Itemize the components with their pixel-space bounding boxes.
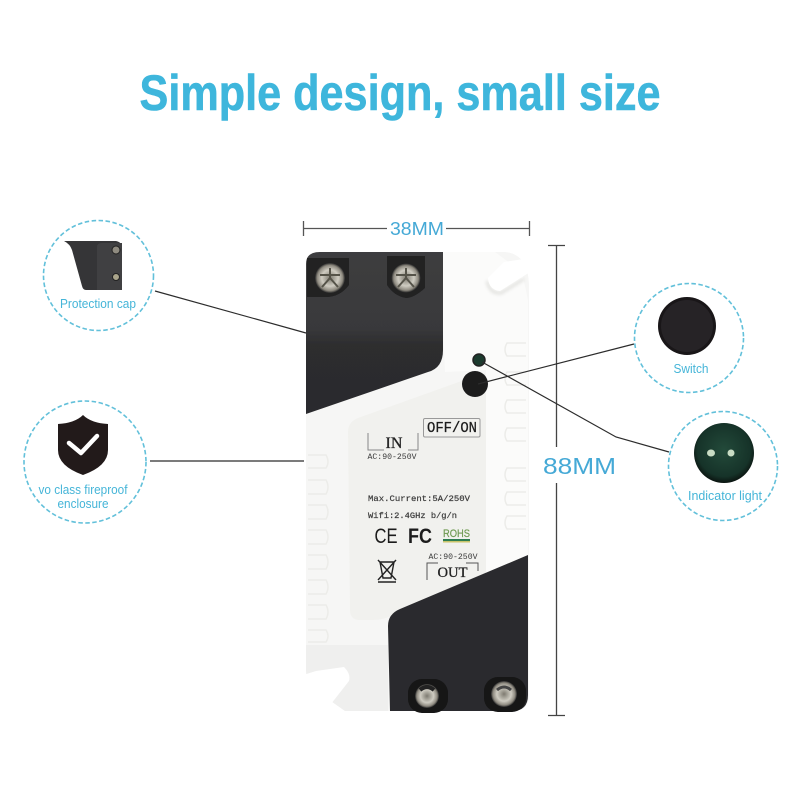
device body	[306, 252, 529, 711]
bottom screws	[408, 677, 526, 713]
icon: shield with check	[58, 415, 108, 475]
indicator light on device	[473, 354, 485, 366]
callout: switch: Switch	[674, 361, 708, 376]
callout: indicator light	[668, 412, 778, 520]
height dimension: 88MM	[543, 246, 616, 716]
callout: indicator light: Indicator light	[688, 488, 762, 503]
callout: protection cap	[44, 220, 154, 330]
OUT marking: OUT	[438, 565, 468, 581]
width dimension: 38MM: 38MM	[390, 218, 444, 239]
corner notch top	[487, 258, 530, 293]
label panel	[348, 373, 486, 620]
disposal mark	[378, 560, 396, 582]
label text	[368, 418, 480, 582]
leader lines	[150, 291, 669, 461]
callout: protection cap: Protection cap	[60, 297, 136, 311]
device: smart switch	[300, 252, 530, 713]
label text: Wifi:2.4GHz b/g/n	[368, 511, 457, 521]
OUT marking: AC:90-250V	[428, 553, 478, 562]
IN marking	[368, 433, 418, 462]
callout: fireproof enclosure: vo class fireproof	[38, 482, 128, 497]
IN marking: AC:90-250V	[368, 453, 417, 462]
bottom protection cap	[388, 555, 528, 711]
width dimension: 38MM	[304, 218, 530, 239]
specifications: Max.Current:5A/250V	[368, 494, 471, 504]
top protection cap	[306, 252, 443, 414]
icon: protection cap	[64, 241, 122, 290]
icon: indicator light	[694, 423, 754, 483]
callout: fireproof enclosure: enclosure	[58, 496, 108, 511]
icon: switch button	[658, 297, 716, 355]
switch button on device	[462, 371, 488, 397]
IN marking: IN	[386, 435, 403, 452]
side ribs	[308, 343, 526, 642]
callout: switch	[634, 284, 744, 392]
CE mark: CE	[374, 525, 398, 548]
FCC mark: FC	[408, 525, 432, 548]
corner notch bottom	[300, 667, 349, 712]
top screws	[307, 256, 425, 298]
title: Simple design, small size	[140, 65, 660, 121]
height dimension: 88MM: 88MM	[543, 453, 616, 479]
OUT marking	[427, 553, 478, 581]
ROHS mark: ROHS	[443, 528, 470, 540]
callout: fireproof enclosure	[24, 401, 146, 523]
OFF/ON box: OFF/ON	[427, 421, 477, 437]
